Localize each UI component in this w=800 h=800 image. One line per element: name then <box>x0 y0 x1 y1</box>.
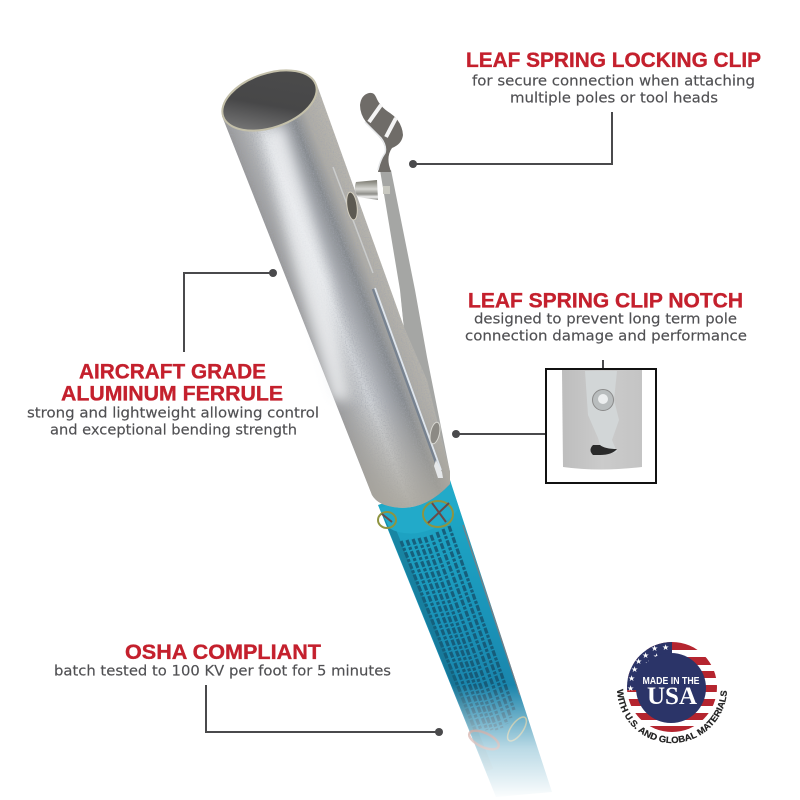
badge center disc <box>636 653 706 723</box>
description: connection damage and performance <box>465 328 747 344</box>
pole: blue insulated shaft <box>377 480 552 794</box>
badge text <box>642 675 700 710</box>
leader line <box>452 360 603 438</box>
badge stars: ★ <box>640 667 647 676</box>
heading: LEAF SPRING CLIP NOTCH <box>468 290 743 312</box>
heading: AIRCRAFT GRADE <box>79 360 266 384</box>
leader line <box>409 112 612 168</box>
badge flag <box>627 642 717 732</box>
description: designed to prevent long term pole <box>474 312 737 328</box>
clip: spring head highlights <box>369 105 396 137</box>
clip pin <box>355 180 378 200</box>
inset photo: notch detail <box>546 369 656 483</box>
badge stars: ★ <box>628 674 635 683</box>
badge stars: ★ <box>642 651 649 660</box>
badge stars: ★ <box>631 665 638 674</box>
heading: LEAF SPRING LOCKING CLIP <box>466 49 761 72</box>
pole fade <box>440 685 570 800</box>
description: strong and lightweight allowing control <box>27 406 319 422</box>
badge stars: ★ <box>645 659 652 668</box>
badge stars: ★ <box>627 684 634 693</box>
badge stars: ★ <box>653 652 660 661</box>
badge text: MADE IN THE <box>642 675 700 687</box>
description: multiple poles or tool heads <box>510 90 718 106</box>
clip small rivet <box>383 186 390 194</box>
description: batch tested to 100 KV per foot for 5 minutes <box>54 664 391 680</box>
clip: leaf spring strip behind tube <box>360 93 450 472</box>
description <box>465 312 747 344</box>
clip lower hook <box>434 460 443 478</box>
callout: aircraft grade aluminum ferrule <box>27 269 319 438</box>
leader line <box>206 685 443 736</box>
leader line <box>184 269 277 352</box>
ferrule hole <box>345 191 359 221</box>
pole logo cap <box>380 482 459 533</box>
ferrule crease lines <box>333 167 441 471</box>
badge text: USA <box>647 683 697 710</box>
badge: made in the USA <box>617 642 727 744</box>
ferrule base tone <box>338 395 450 508</box>
callout: leaf spring locking clip <box>409 49 761 168</box>
badge stars: ★ <box>662 643 669 652</box>
description <box>27 406 319 438</box>
description: for secure connection when attaching <box>472 74 755 90</box>
pole edge shading <box>383 516 520 739</box>
pole lower logos <box>467 714 530 753</box>
description: and exceptional bending strength <box>50 422 297 438</box>
description <box>472 74 755 106</box>
heading: OSHA COMPLIANT <box>125 641 321 664</box>
callout: leaf spring clip notch <box>452 290 747 483</box>
badge stars: ★ <box>651 644 658 653</box>
heading <box>61 360 283 406</box>
badge stars <box>627 643 669 693</box>
badge curved caption: WITH U.S. AND GLOBAL MATERIALS <box>617 688 727 744</box>
badge stars: ★ <box>635 657 642 666</box>
ferrule mouth <box>214 59 325 142</box>
pole logo mark <box>378 501 453 528</box>
heading: ALUMINUM FERRULE <box>61 382 283 406</box>
pole printed text <box>401 526 514 730</box>
clip: spring head <box>360 93 403 172</box>
ferrule highlight <box>262 126 350 400</box>
clip rivet <box>428 421 442 445</box>
ferrule: aluminum tube <box>214 59 450 508</box>
callout: OSHA compliant <box>54 641 443 736</box>
